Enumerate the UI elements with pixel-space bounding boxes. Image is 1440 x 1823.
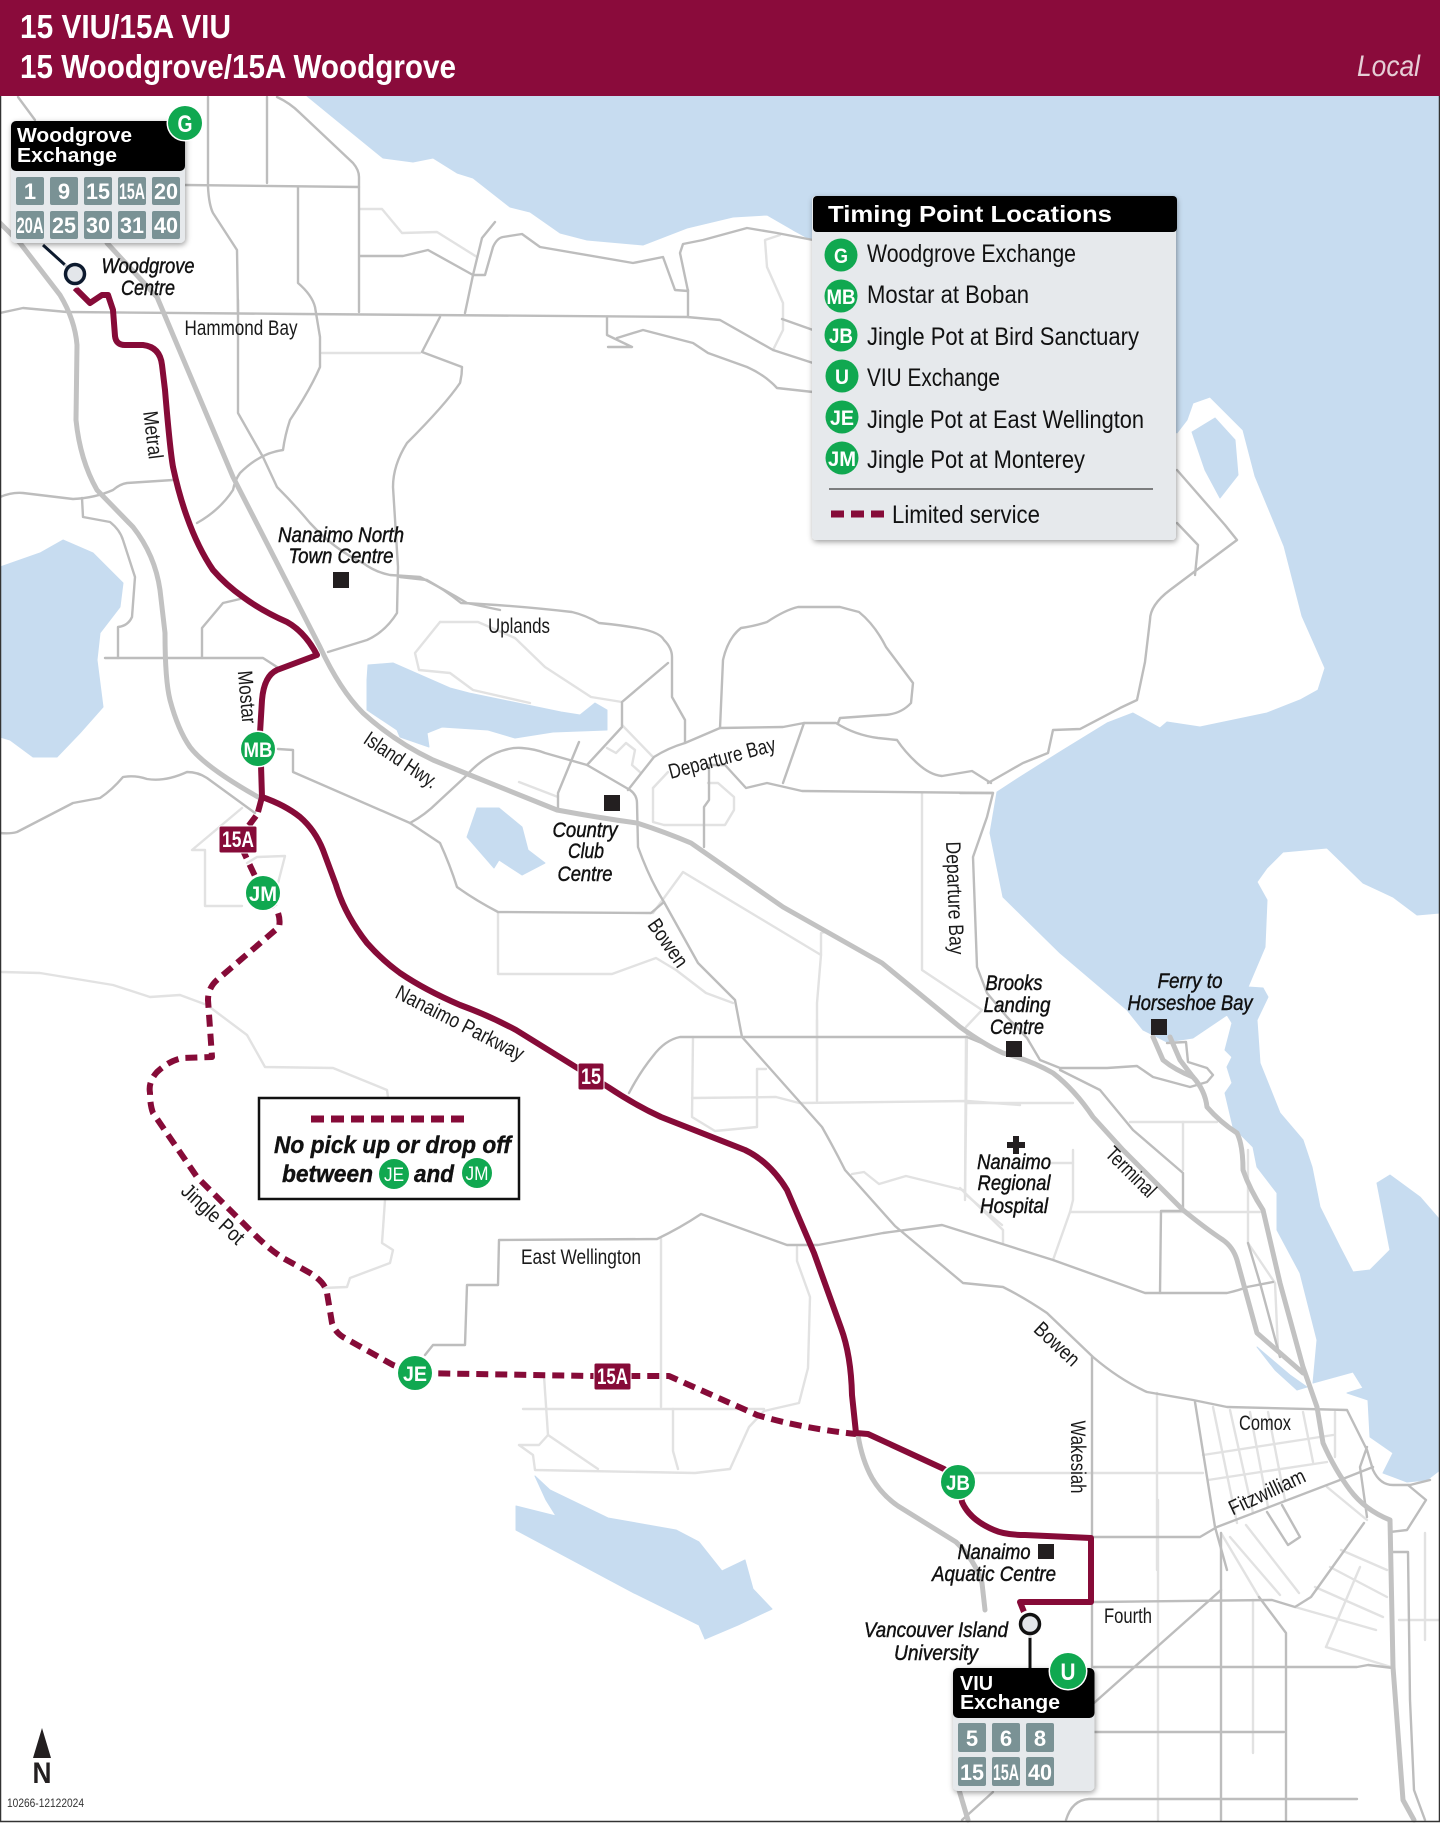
panel: timing point locations legend: Limited service [892,501,1040,529]
map labels: streets: Hammond Bay [184,317,298,340]
route 15 solid line [75,288,1091,1612]
panel: timing point locations legend: JB [829,325,853,348]
map labels: landmarks: Nanaimo North [278,524,404,547]
Woodgrove Exchange panel: 30 [86,213,110,238]
map labels: landmarks: Centre [121,277,175,300]
VIU Exchange panel: 15 [960,1760,984,1785]
panel: timing point locations legend: VIU Exchange [867,364,1000,392]
map labels: landmarks: University [894,1642,979,1665]
no pick up note: No pick up or drop off [274,1132,513,1159]
map labels: landmarks: Club [568,840,604,863]
timing point G on Woodgrove panel: G [178,111,192,138]
map labels: streets: Uplands [488,615,550,638]
VIU stop marker [1016,1610,1044,1668]
Woodgrove Exchange panel: Exchange [17,145,117,167]
map labels: streets: Bowen [1029,1318,1084,1371]
panel: timing point locations legend: JM [828,448,856,471]
map labels: streets: Bowen [643,915,692,972]
map labels: streets: Jingle Pot [176,1179,249,1249]
route 15A dashed line [150,816,856,1434]
timing point G on Woodgrove panel [166,104,204,142]
VIU Exchange panel: 5 [966,1726,978,1751]
map labels: streets: Wakesiah [1066,1420,1089,1494]
route badge 15A north: 15A [222,827,254,852]
header banner: Local [1357,50,1421,83]
north arrow [32,1728,52,1790]
water: north inlet lake [1192,418,1238,498]
map labels: landmarks: Vancouver Island [864,1619,1009,1642]
Woodgrove Exchange panel: Woodgrove [17,125,132,147]
no pick up note: JE [384,1165,404,1186]
map labels: landmarks: Woodgrove [102,255,194,278]
Woodgrove Centre stop marker [43,245,89,288]
VIU Exchange panel: Exchange [960,1692,1060,1714]
map labels: streets: Fourth [1104,1605,1152,1628]
panel: timing point locations legend: JE [830,407,854,430]
VIU Exchange panel: 8 [1034,1726,1046,1751]
no pick up note [259,1098,519,1199]
map labels: streets: Departure Bay [666,733,779,784]
map labels: landmarks: Town Centre [288,545,394,568]
landmark markers [333,572,1167,1559]
north arrow: N [32,1757,52,1790]
map labels: landmarks [102,255,1254,1665]
map labels: streets: Comox [1239,1412,1291,1435]
timing point U on VIU panel: U [1060,1659,1076,1686]
map labels: streets: East Wellington [521,1246,641,1269]
map labels: streets: Island Hwy. [359,727,442,793]
water: estuary sliver [1257,1347,1307,1390]
map labels: streets: Mostar [233,670,260,724]
map code: 10266-12122024 [7,1798,85,1810]
header banner: 15 VIU/15A VIU [20,8,231,45]
map labels: landmarks: Landing [984,994,1051,1017]
map labels: streets: Terminal [1101,1142,1161,1202]
map labels: landmarks: Brooks [986,972,1043,995]
header banner: 15 Woodgrove/15A Woodgrove [20,48,456,85]
timing point JE [396,1354,434,1392]
panel: timing point locations legend: Timing Point Locations [828,201,1112,227]
panel: timing point locations legend: G [834,245,848,268]
no pick up note: and [414,1161,455,1188]
VIU Exchange panel [953,1668,1094,1791]
VIU Exchange panel: 40 [1028,1760,1052,1785]
Woodgrove Exchange panel: 20 [154,179,178,204]
VIU Exchange panel: 6 [1000,1726,1012,1751]
panel: timing point locations legend: MB [826,286,856,309]
map labels: landmarks: Centre [990,1016,1044,1039]
map labels: streets: Metral [138,410,167,460]
map labels: landmarks: Aquatic Centre [930,1563,1056,1586]
water: south lake [516,1476,772,1639]
water: small lake [467,808,545,875]
Woodgrove Exchange panel: 25 [52,213,76,238]
map labels: landmarks: Nanaimo [958,1541,1031,1564]
map labels: streets [138,317,1309,1628]
header banner [0,0,1440,96]
timing point U on VIU panel [1048,1652,1088,1690]
timing point MB: MB [244,739,272,762]
panel: timing point locations legend: U [835,366,849,389]
map labels: landmarks: Ferry to [1158,970,1223,993]
route badge 15A centre: 15A [597,1364,628,1389]
Woodgrove Exchange panel: 20A [16,213,44,238]
panel: timing point locations legend: Jingle Pot at Bird Sanctuary [867,323,1139,351]
map labels: landmarks: Country [552,819,619,842]
Woodgrove Exchange panel: 15A [119,179,145,204]
VIU Exchange panel: 15A [993,1760,1019,1785]
panel: timing point locations legend: Jingle Pot at Monterey [867,446,1085,474]
water: west lake [0,540,123,757]
water: Brannen lake [367,663,607,747]
route 15A short solid stub [258,797,262,812]
map labels: streets: Nanaimo Parkway [392,981,528,1066]
timing point JM: JM [249,883,277,906]
water: sea and harbour [307,96,1440,1482]
Woodgrove Exchange panel: 1 [24,179,36,204]
map labels: landmarks: Horseshoe Bay [1128,992,1254,1015]
panel: timing point locations legend: Mostar at Boban [867,281,1029,309]
map labels: streets: Fitzwilliam [1225,1465,1309,1520]
Woodgrove Exchange panel: 9 [58,179,70,204]
panel: timing point locations legend: Woodgrove Exchange [867,240,1076,268]
timing point JM [244,874,282,912]
map labels: landmarks: Centre [558,863,612,886]
map labels: landmarks: Nanaimo [977,1151,1051,1174]
route badge 15: 15 [581,1064,601,1089]
timing point JB [940,1464,976,1500]
Woodgrove Exchange panel: 15 [86,179,110,204]
no pick up note: JM [466,1164,488,1185]
map labels: landmarks: Hospital [980,1195,1049,1218]
Woodgrove Exchange panel: 31 [120,213,144,238]
timing point JE: JE [403,1363,427,1386]
panel: timing point locations legend [812,196,1177,540]
map labels: landmarks: Regional [978,1172,1052,1195]
VIU Exchange panel: VIU [960,1673,993,1695]
Woodgrove Exchange panel: 40 [154,213,178,238]
map labels: streets: Departure Bay [941,841,968,955]
timing point MB [240,730,276,768]
Woodgrove Exchange panel [11,121,185,243]
no pick up note: between [282,1161,373,1188]
panel: timing point locations legend: Jingle Pot at East Wellington [867,406,1144,434]
timing point JB: JB [946,1472,970,1495]
